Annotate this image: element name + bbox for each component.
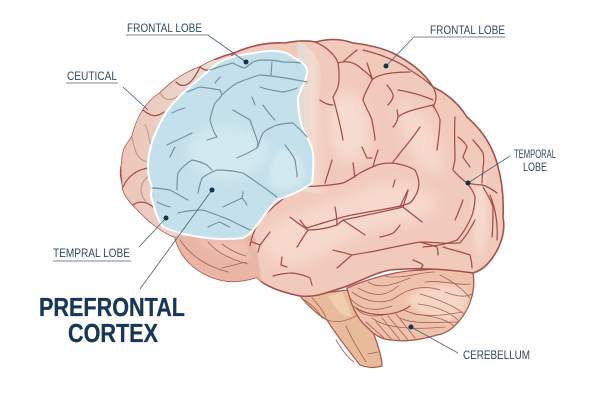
soft shading — [115, 40, 488, 285]
label: temporal lobe lower left: TEMPRAL LOBE — [53, 246, 130, 260]
label: temporal lobe: TEMPORAL — [514, 147, 556, 161]
title: prefrontal cortex: CORTEX — [68, 318, 159, 348]
leader line: prefrontal cortex — [140, 188, 214, 289]
main cerebrum silhouette — [121, 39, 504, 296]
label: cerebellum — [408, 324, 530, 362]
label: frontal lobe (right) — [384, 23, 505, 68]
label: temporal lobe — [466, 147, 556, 186]
title: prefrontal cortex: PREFRONTAL — [39, 292, 185, 322]
label: frontal lobe (right): FRONTAL LOBE — [430, 23, 505, 37]
brainstem — [300, 290, 382, 367]
label: temporal lobe: LOBE — [523, 160, 547, 174]
label: temporal lobe lower left — [53, 216, 168, 261]
frontal sulci — [315, 42, 497, 247]
label: frontal lobe (left): FRONTAL LOBE — [127, 21, 202, 35]
label: ceutical: CEUTICAL — [67, 69, 117, 83]
prefrontal highlighted region — [148, 51, 313, 239]
label: cerebellum: CEREBELLUM — [463, 348, 530, 362]
title: prefrontal cortex — [39, 292, 185, 348]
blue lobe sulci — [152, 60, 307, 230]
temporal lobe fold — [250, 163, 475, 285]
brain illustration — [115, 39, 504, 367]
label: ceutical — [66, 69, 148, 110]
cerebellum — [347, 269, 474, 341]
label: frontal lobe (left) — [126, 21, 248, 64]
left rim folds — [123, 53, 248, 272]
